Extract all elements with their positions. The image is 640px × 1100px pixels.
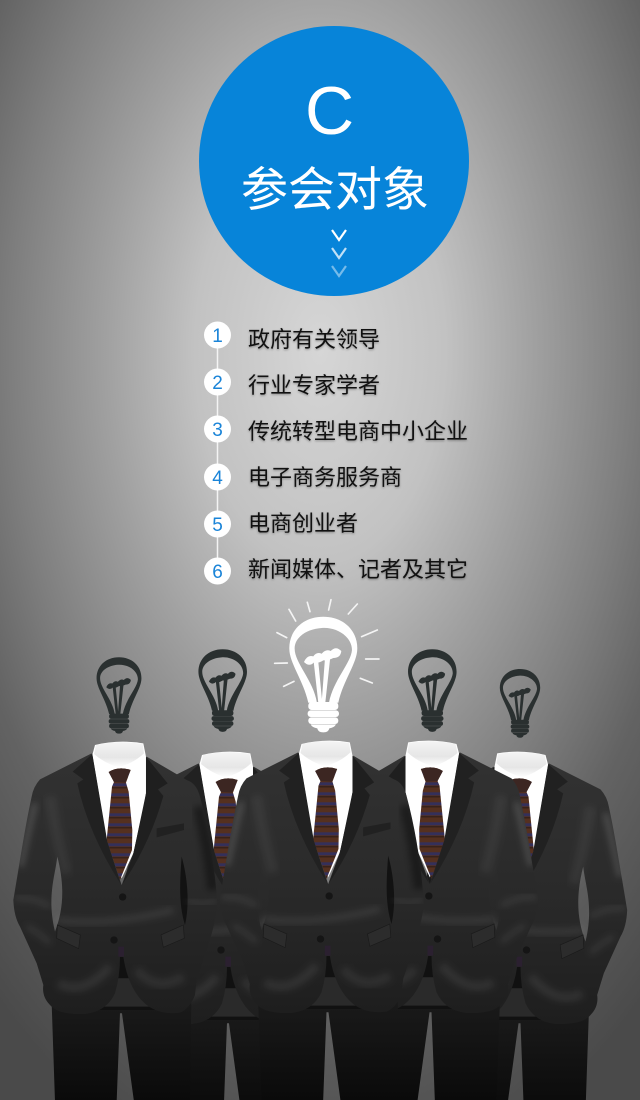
list item 2 [204,368,380,398]
list item 5 [204,510,358,538]
figure: suit far left [13,742,217,1100]
list item 6: 新闻媒体、记者及其它 [248,557,468,582]
list item 5: 电商创业者 [248,511,358,536]
list item 3: 3 [212,420,223,441]
list item 6: 6 [212,562,223,583]
figure: suit centre [220,741,424,1100]
list item 2: 行业专家学者 [248,373,380,398]
list item 1 [204,322,380,352]
icon: dark bulb far right [500,669,540,738]
list item 3: 传统转型电商中小企业 [248,419,468,444]
figure: suit second from right [334,741,538,1100]
list item 2: 2 [212,373,223,394]
list item 5: 5 [212,515,223,536]
figure: suit second from left [120,752,324,1100]
list item 1: 政府有关领导 [248,327,380,352]
panel: blue title circle [199,26,469,296]
icon: dark bulb far left [97,657,141,734]
list item 1: 1 [212,326,223,347]
panel: attendee list [204,322,468,584]
list item 4: 4 [212,468,223,489]
icon: dark bulb second [198,649,247,732]
icon: glowing white centre bulb with rays [275,600,379,732]
letter C: C [305,73,354,149]
icon: dark bulb fourth [408,649,457,732]
list item 4: 电子商务服务商 [248,465,402,490]
heading: 参会对象: 参会对象 [241,163,429,216]
icon: downward chevrons [332,230,346,276]
figure: suit far right [423,752,627,1100]
